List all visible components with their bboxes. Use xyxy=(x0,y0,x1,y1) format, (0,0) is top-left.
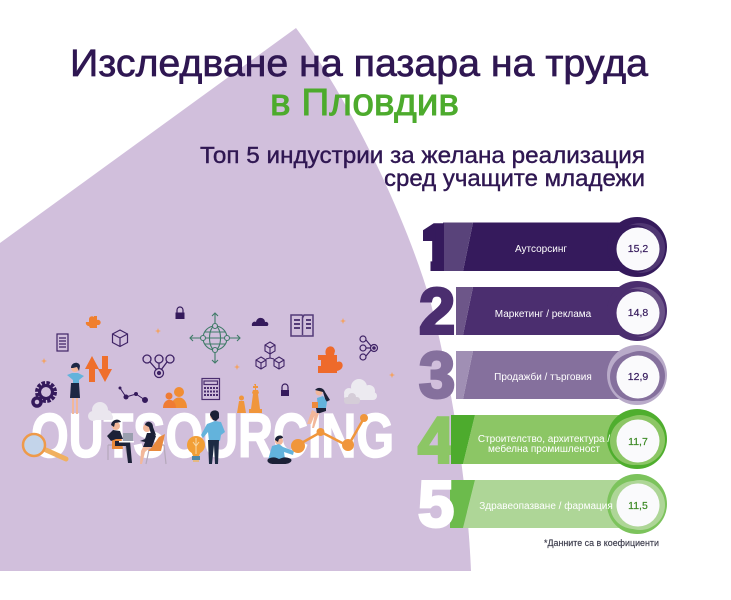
woman sitting xyxy=(307,388,330,428)
icon: up and down arrows xyxy=(85,356,112,382)
subtitle xyxy=(200,142,645,191)
rank 3: Продажби / търговия: 12,9 xyxy=(628,371,648,383)
rank 2: Маркетинг / реклама xyxy=(419,274,667,348)
icon: gears xyxy=(33,384,54,406)
title: в Пловдив xyxy=(270,82,459,124)
icon: clouds right xyxy=(344,379,377,404)
icon: woman standing xyxy=(67,363,84,414)
title xyxy=(70,43,649,124)
icon: cloud xyxy=(88,402,113,421)
rank 3: Продажби / търговия: Продажби / търговия xyxy=(494,371,592,383)
footnote: *Данните са в коефициенти xyxy=(544,538,659,548)
rank 2: Маркетинг / реклама: 2 xyxy=(419,274,455,348)
rank 1: Аутсорсинг: Аутсорсинг xyxy=(515,244,567,255)
rank 1: Аутсорсинг xyxy=(423,217,667,277)
outsourcing word: OUTSOURCING xyxy=(31,402,394,471)
icon: line graph xyxy=(119,387,148,402)
rank 5: Здравеопазване / фармация: 11,5 xyxy=(628,500,648,512)
icon: open book xyxy=(291,315,313,336)
man sitting xyxy=(267,436,294,464)
rank 4: Строителство, архитектура / мебелна промишленост: Строителство, архитектура / xyxy=(478,434,610,445)
rank 5: Здравеопазване / фармация: Здравеопазване / фармация xyxy=(479,500,613,512)
icon: globe network xyxy=(190,313,240,363)
rank 3: Продажби / търговия: 3 xyxy=(419,338,455,412)
rank 3: Продажби / търговия xyxy=(419,338,667,412)
people at table xyxy=(107,420,166,464)
orange line chart xyxy=(291,414,368,453)
icon: document xyxy=(57,334,68,351)
icon: calculator xyxy=(202,378,220,400)
subtitle: сред учащите младежи xyxy=(384,165,645,191)
rank 4: Строителство, архитектура / мебелна промишленост: мебелна промишленост xyxy=(488,443,600,455)
icon: plus sparkles xyxy=(41,318,395,378)
rank 5: Здравеопазване / фармация: 5 xyxy=(418,468,454,540)
icon: light bulb xyxy=(187,436,205,462)
icon: small puzzle xyxy=(86,316,101,328)
rank 4: Строителство, архитектура / мебелна промишленост: 4 xyxy=(418,404,454,476)
icon: chess pieces xyxy=(237,384,262,413)
icon: big puzzle xyxy=(318,346,343,373)
icon: node tree xyxy=(143,355,174,378)
rank 4: Строителство, архитектура / мебелна промишленост: 11,7 xyxy=(628,436,648,448)
rank 2: Маркетинг / реклама: Маркетинг / реклама xyxy=(495,309,592,320)
rank 1: Аутсорсинг: 1 xyxy=(418,210,455,284)
ranking list xyxy=(418,210,667,540)
background lilac shape xyxy=(0,28,471,571)
subtitle: Топ 5 индустрии за желана реализация xyxy=(200,142,645,168)
icon: right nodes xyxy=(360,336,378,360)
rank 4: Строителство, архитектура / мебелна промишленост xyxy=(418,404,667,476)
icon: magnifier xyxy=(23,434,66,459)
icon: people xyxy=(163,387,187,408)
title: Изследване на пазара на труда xyxy=(70,43,649,85)
man standing xyxy=(201,410,225,464)
outsourcing illustration xyxy=(23,307,395,471)
icon: dark cloud xyxy=(252,318,268,326)
icon: lock small xyxy=(281,384,289,396)
icon: linked cubes xyxy=(256,342,284,369)
rank 5: Здравеопазване / фармация xyxy=(418,468,667,540)
rank 1: Аутсорсинг: 15,2 xyxy=(628,243,648,255)
rank 2: Маркетинг / реклама: 14,8 xyxy=(628,307,648,319)
icon: cube xyxy=(112,330,128,346)
icon: lock xyxy=(176,307,184,319)
